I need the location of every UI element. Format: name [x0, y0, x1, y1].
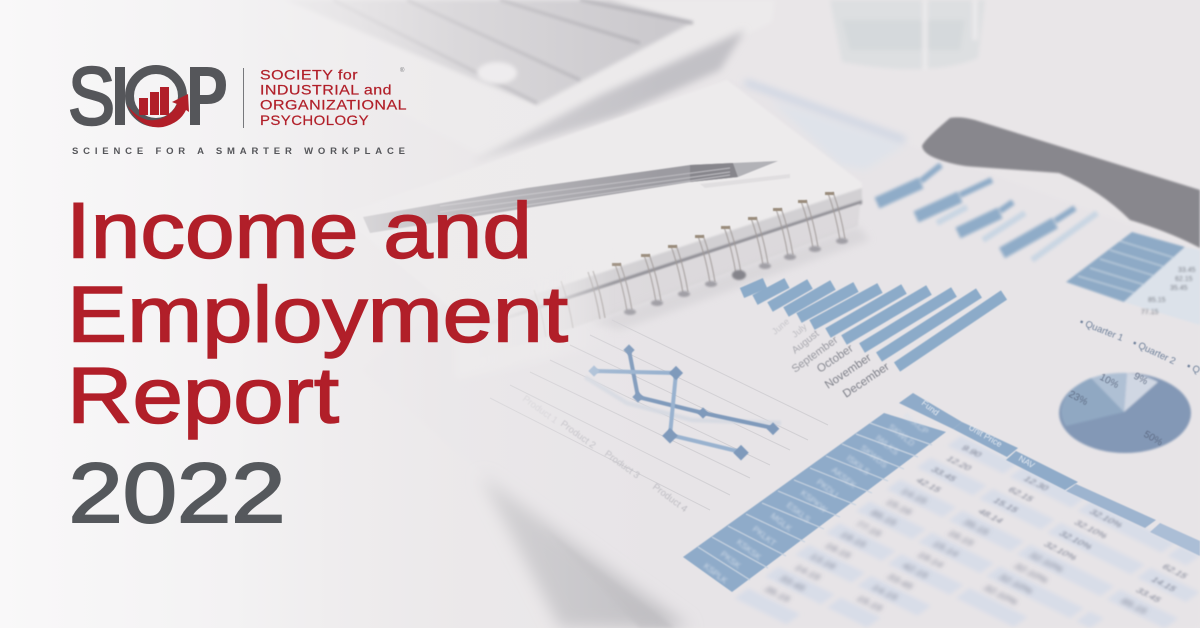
product labels: Product 4	[650, 482, 689, 515]
table data text, lower rows: 14.15	[898, 488, 930, 506]
table data text, lower rows: 33.45	[776, 575, 808, 593]
pie chart with legend: ▪ Quarter 2	[1131, 338, 1177, 367]
table data text, upper rows	[913, 444, 1190, 604]
table data text, upper rows: 33.45	[928, 466, 959, 483]
logo tagline: SCIENCE FOR A SMARTER WORKPLACE	[72, 146, 405, 157]
fund names: PKLKT	[751, 524, 778, 548]
month bar chart	[742, 283, 1004, 367]
month labels: July	[790, 321, 809, 340]
table header text: NAV	[1017, 453, 1037, 470]
product labels: Product 1	[520, 394, 560, 426]
product labels	[520, 394, 689, 515]
logo organization name: SOCIETY for	[260, 66, 358, 82]
fund names: ESKLS	[785, 500, 813, 525]
logo organization name: INDUSTRIAL and	[260, 82, 392, 98]
upper right table: 77.15	[1141, 309, 1159, 316]
table data text, lower rows: 35.15	[960, 519, 992, 537]
clipboard clip	[922, 117, 1200, 248]
fund names: PKSK	[719, 549, 743, 571]
table data text, upper rows: 48.14	[975, 508, 1006, 525]
table data text, lower rows: 15.14	[929, 540, 962, 558]
table header text	[920, 398, 1037, 470]
table data text, lower rows: 16.15	[822, 542, 854, 560]
table data cells	[735, 436, 1200, 628]
water glass	[830, 0, 985, 70]
table data text, lower rows: 85.15	[1118, 598, 1150, 616]
pie chart with legend: 23%	[1067, 389, 1090, 408]
fund names: BKKCP	[902, 411, 931, 437]
fund names: KSKSK	[735, 537, 764, 562]
sheet edge shadow	[480, 475, 690, 628]
table data text, lower rows: 15.15	[853, 595, 886, 613]
table data text, upper rows: 62.15	[1005, 486, 1036, 503]
title	[66, 186, 568, 440]
lower data table	[683, 393, 1200, 628]
table data text, lower rows: 13.16	[806, 553, 839, 571]
upper right table: 35.45	[1170, 285, 1188, 292]
month labels: September	[790, 334, 841, 375]
table data text, upper rows: 32.10%	[1041, 541, 1080, 562]
upper right table: 62.15	[1175, 276, 1193, 283]
spiral binding	[534, 192, 845, 337]
table data text, lower rows: 32.10%	[995, 573, 1036, 596]
logo organization name: PSYCHOLOGY	[260, 112, 369, 128]
table data text, lower rows: 35.15	[761, 586, 793, 604]
logo organization name	[260, 66, 407, 128]
logo divider	[243, 68, 244, 128]
table data text, upper rows: 32.10%	[1071, 519, 1111, 540]
year: 2022	[68, 446, 286, 540]
title: Income and	[66, 186, 532, 274]
table data text, lower rows: 32.10%	[1026, 552, 1066, 574]
table data text, lower rows: 32.10%	[1010, 563, 1051, 585]
table left column	[683, 413, 946, 592]
table data text, upper rows: 12.20	[943, 455, 974, 472]
table data text, upper rows: 15.15	[990, 497, 1021, 514]
upper right table: 33.45	[1178, 267, 1196, 274]
table data text, lower rows: 42.15	[899, 562, 931, 580]
table data text, upper rows: 9.90	[958, 444, 984, 459]
registered mark: ®	[400, 67, 405, 74]
table data text, upper rows: 42.15	[913, 477, 944, 494]
table header text: Fund	[920, 398, 941, 418]
title: Report	[67, 350, 339, 440]
table data text, upper rows: 32.10%	[1086, 508, 1126, 530]
title: Employment	[67, 270, 568, 358]
fund names: KSPKW	[799, 488, 829, 514]
table data text, lower rows: 16.15	[944, 530, 977, 548]
pie chart with legend: ▪ Quarter 1	[1078, 317, 1125, 344]
fund names: KSPLK	[702, 561, 730, 586]
upper right table	[1066, 232, 1200, 325]
month labels: November	[823, 352, 874, 391]
fund names	[702, 411, 931, 586]
logo wordmark: S	[68, 51, 115, 142]
month labels: December	[841, 361, 892, 400]
month labels	[770, 316, 892, 400]
table data text, lower rows: 33.45	[884, 573, 916, 591]
notebook	[340, 80, 870, 380]
table data text, lower rows: 85.15	[867, 509, 900, 527]
logo bar icon	[139, 87, 169, 115]
upper right table: 85.15	[1148, 297, 1166, 304]
pie chart with legend: 10%	[1098, 372, 1121, 391]
laptop	[260, 0, 775, 163]
table data text, upper rows: 14.15	[1148, 576, 1179, 593]
fund names: SKWLD	[887, 422, 917, 448]
logo organization name: ORGANIZATIONAL	[260, 96, 407, 112]
table data text, lower rows: 14.15	[791, 564, 824, 582]
table data text, lower rows: 19.15	[837, 531, 869, 549]
pie chart with legend	[1059, 317, 1200, 453]
table header text: Unit Price	[967, 422, 1004, 449]
table data text, upper rows: 33.45	[1133, 587, 1164, 604]
fund names: ISKILS	[845, 453, 872, 477]
fund names: PKDLI	[815, 477, 840, 500]
product labels: Product 3	[602, 449, 642, 481]
month labels: June	[770, 316, 791, 337]
fund names: MGLK	[769, 511, 794, 534]
upper bar chart	[877, 165, 1097, 260]
product labels: Product 2	[558, 419, 598, 451]
table data text, upper rows: 32.10%	[1056, 530, 1095, 551]
logo swoosh arrow	[127, 94, 189, 127]
table data text, lower rows: 14.15	[868, 584, 901, 602]
table data text, lower rows: 32.10%	[980, 584, 1021, 606]
fund names: SKWDS	[859, 443, 890, 470]
report sheet	[360, 80, 1200, 628]
table data text, upper rows: 12.30	[1020, 475, 1051, 492]
table header cells	[899, 393, 1200, 556]
SIOP logo	[68, 51, 407, 157]
fund names: AKSEK	[830, 465, 859, 490]
pie chart with legend: 9%	[1132, 371, 1150, 387]
month labels: October	[815, 343, 856, 375]
table data text, lower rows: 77.15	[852, 520, 884, 538]
table data text, lower rows	[761, 488, 1150, 616]
table data text, lower rows: 19.14	[914, 551, 946, 569]
line chart	[490, 320, 828, 510]
blurred blue chart behind clip	[745, 82, 905, 170]
logo wordmark	[68, 51, 226, 142]
pie chart with legend: 50%	[1142, 429, 1164, 449]
month labels: August	[790, 328, 822, 356]
table data text, lower rows: 15.16	[882, 499, 915, 517]
fund names: IWLKS	[874, 433, 901, 457]
table data text, upper rows: 62.15	[1159, 563, 1190, 580]
pen	[363, 161, 790, 233]
